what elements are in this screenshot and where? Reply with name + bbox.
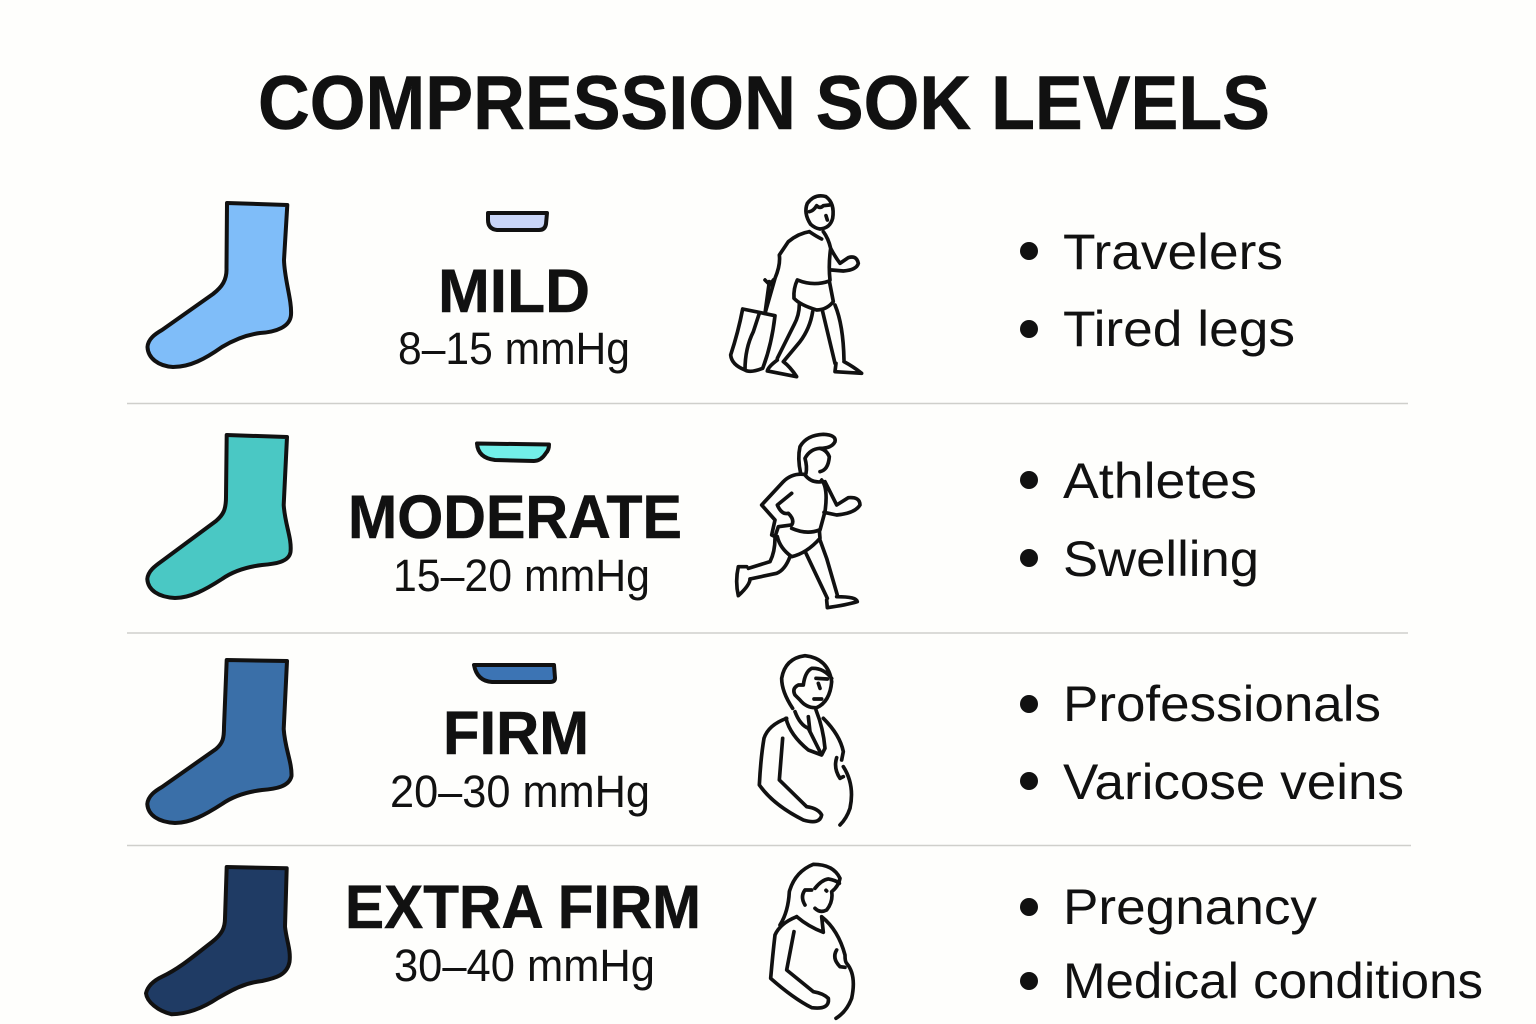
icon: navy sock bbox=[146, 867, 290, 1014]
title: COMPRESSION SOK LEVELS bbox=[258, 61, 1270, 146]
list: firm uses: Varicose veins bbox=[1063, 754, 1404, 810]
heading: firm: FIRM bbox=[443, 699, 589, 767]
panel: moderate row bbox=[147, 434, 1259, 608]
pressure range: firm: 20–30 mmHg bbox=[390, 766, 650, 817]
icon: light blue sock bbox=[148, 203, 291, 367]
icon: mild compression bar bbox=[488, 213, 547, 230]
pressure range: mild: 8–15 mmHg bbox=[398, 323, 630, 374]
list: moderate uses bbox=[1020, 453, 1259, 587]
icon: pregnant woman bbox=[771, 864, 853, 1018]
list: firm uses bbox=[1020, 676, 1404, 810]
heading: extra firm: EXTRA FIRM bbox=[345, 873, 701, 941]
icon: runner bbox=[737, 434, 860, 608]
heading: mild: MILD bbox=[438, 257, 590, 325]
pressure range: extra firm: 30–40 mmHg bbox=[394, 940, 655, 991]
list: extra firm uses: Medical conditions bbox=[1063, 953, 1483, 1009]
icon: teal sock bbox=[147, 435, 291, 598]
panel: extra firm row bbox=[146, 864, 1483, 1018]
list: mild uses: Tired legs bbox=[1063, 301, 1295, 357]
list: extra firm uses bbox=[1020, 879, 1483, 1009]
list: moderate uses: Swelling bbox=[1063, 531, 1259, 587]
panel: firm row bbox=[147, 656, 1404, 825]
pressure range: moderate: 15–20 mmHg bbox=[393, 550, 650, 601]
panel: mild row bbox=[148, 196, 1295, 377]
list: firm uses: Professionals bbox=[1063, 676, 1381, 732]
icon: firm compression bar bbox=[474, 665, 555, 682]
list: moderate uses: Athletes bbox=[1063, 453, 1257, 509]
icon: mid blue sock bbox=[147, 660, 292, 823]
icon: professional figure bbox=[759, 656, 851, 825]
icon: moderate compression bar bbox=[477, 444, 549, 461]
heading: moderate: MODERATE bbox=[348, 483, 682, 551]
icon: traveler walking with bag bbox=[731, 196, 862, 377]
list: extra firm uses: Pregnancy bbox=[1063, 879, 1317, 935]
list: mild uses bbox=[1020, 224, 1295, 357]
list: mild uses: Travelers bbox=[1063, 224, 1283, 280]
